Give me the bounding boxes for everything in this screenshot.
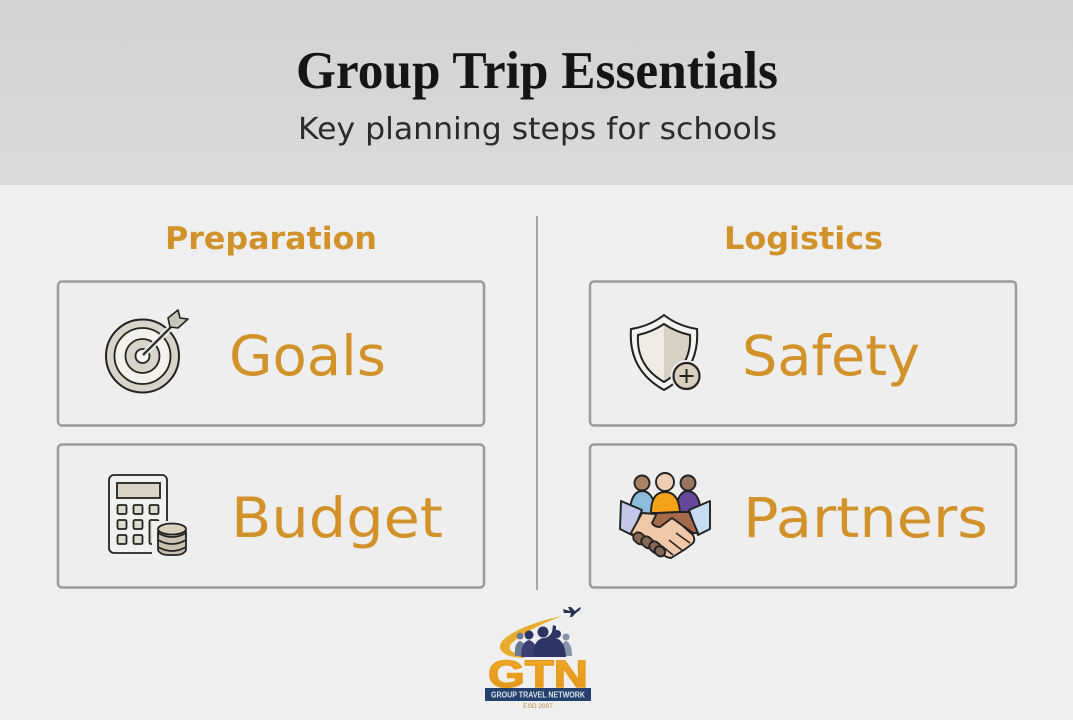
panel: Safety: [590, 282, 1016, 426]
icon: target with arrow: [106, 310, 188, 392]
label: Safety: Safety: [742, 324, 920, 388]
icon: plane: [563, 607, 580, 617]
established date: ESD 2007: [523, 703, 553, 710]
people silhouettes: [515, 625, 572, 657]
icon: calculator and coins: [109, 475, 188, 559]
panel: Partners: [590, 444, 1016, 588]
header band: [0, 0, 1073, 185]
icon: shield with plus: [631, 315, 702, 392]
wordmark: GTN: GTN: [488, 654, 588, 696]
subtitle: Key planning steps for schools: [298, 112, 777, 147]
heading: Logistics: Logistics: [724, 221, 883, 257]
swoosh: [500, 616, 562, 658]
label: Partners: Partners: [743, 486, 988, 550]
panel: Budget: [58, 444, 484, 588]
panel: Goals: [58, 282, 484, 426]
logo: GTN Group Travel Network: [485, 607, 591, 710]
heading: Preparation: Preparation: [165, 221, 377, 257]
label: Goals: Goals: [229, 324, 386, 388]
banner: Group Travel Network: GROUP TRAVEL NETWORK: [491, 690, 585, 700]
title: Group Trip Essentials: [296, 42, 778, 100]
icon: people and handshake: [620, 473, 710, 558]
label: Budget: Budget: [231, 486, 443, 550]
